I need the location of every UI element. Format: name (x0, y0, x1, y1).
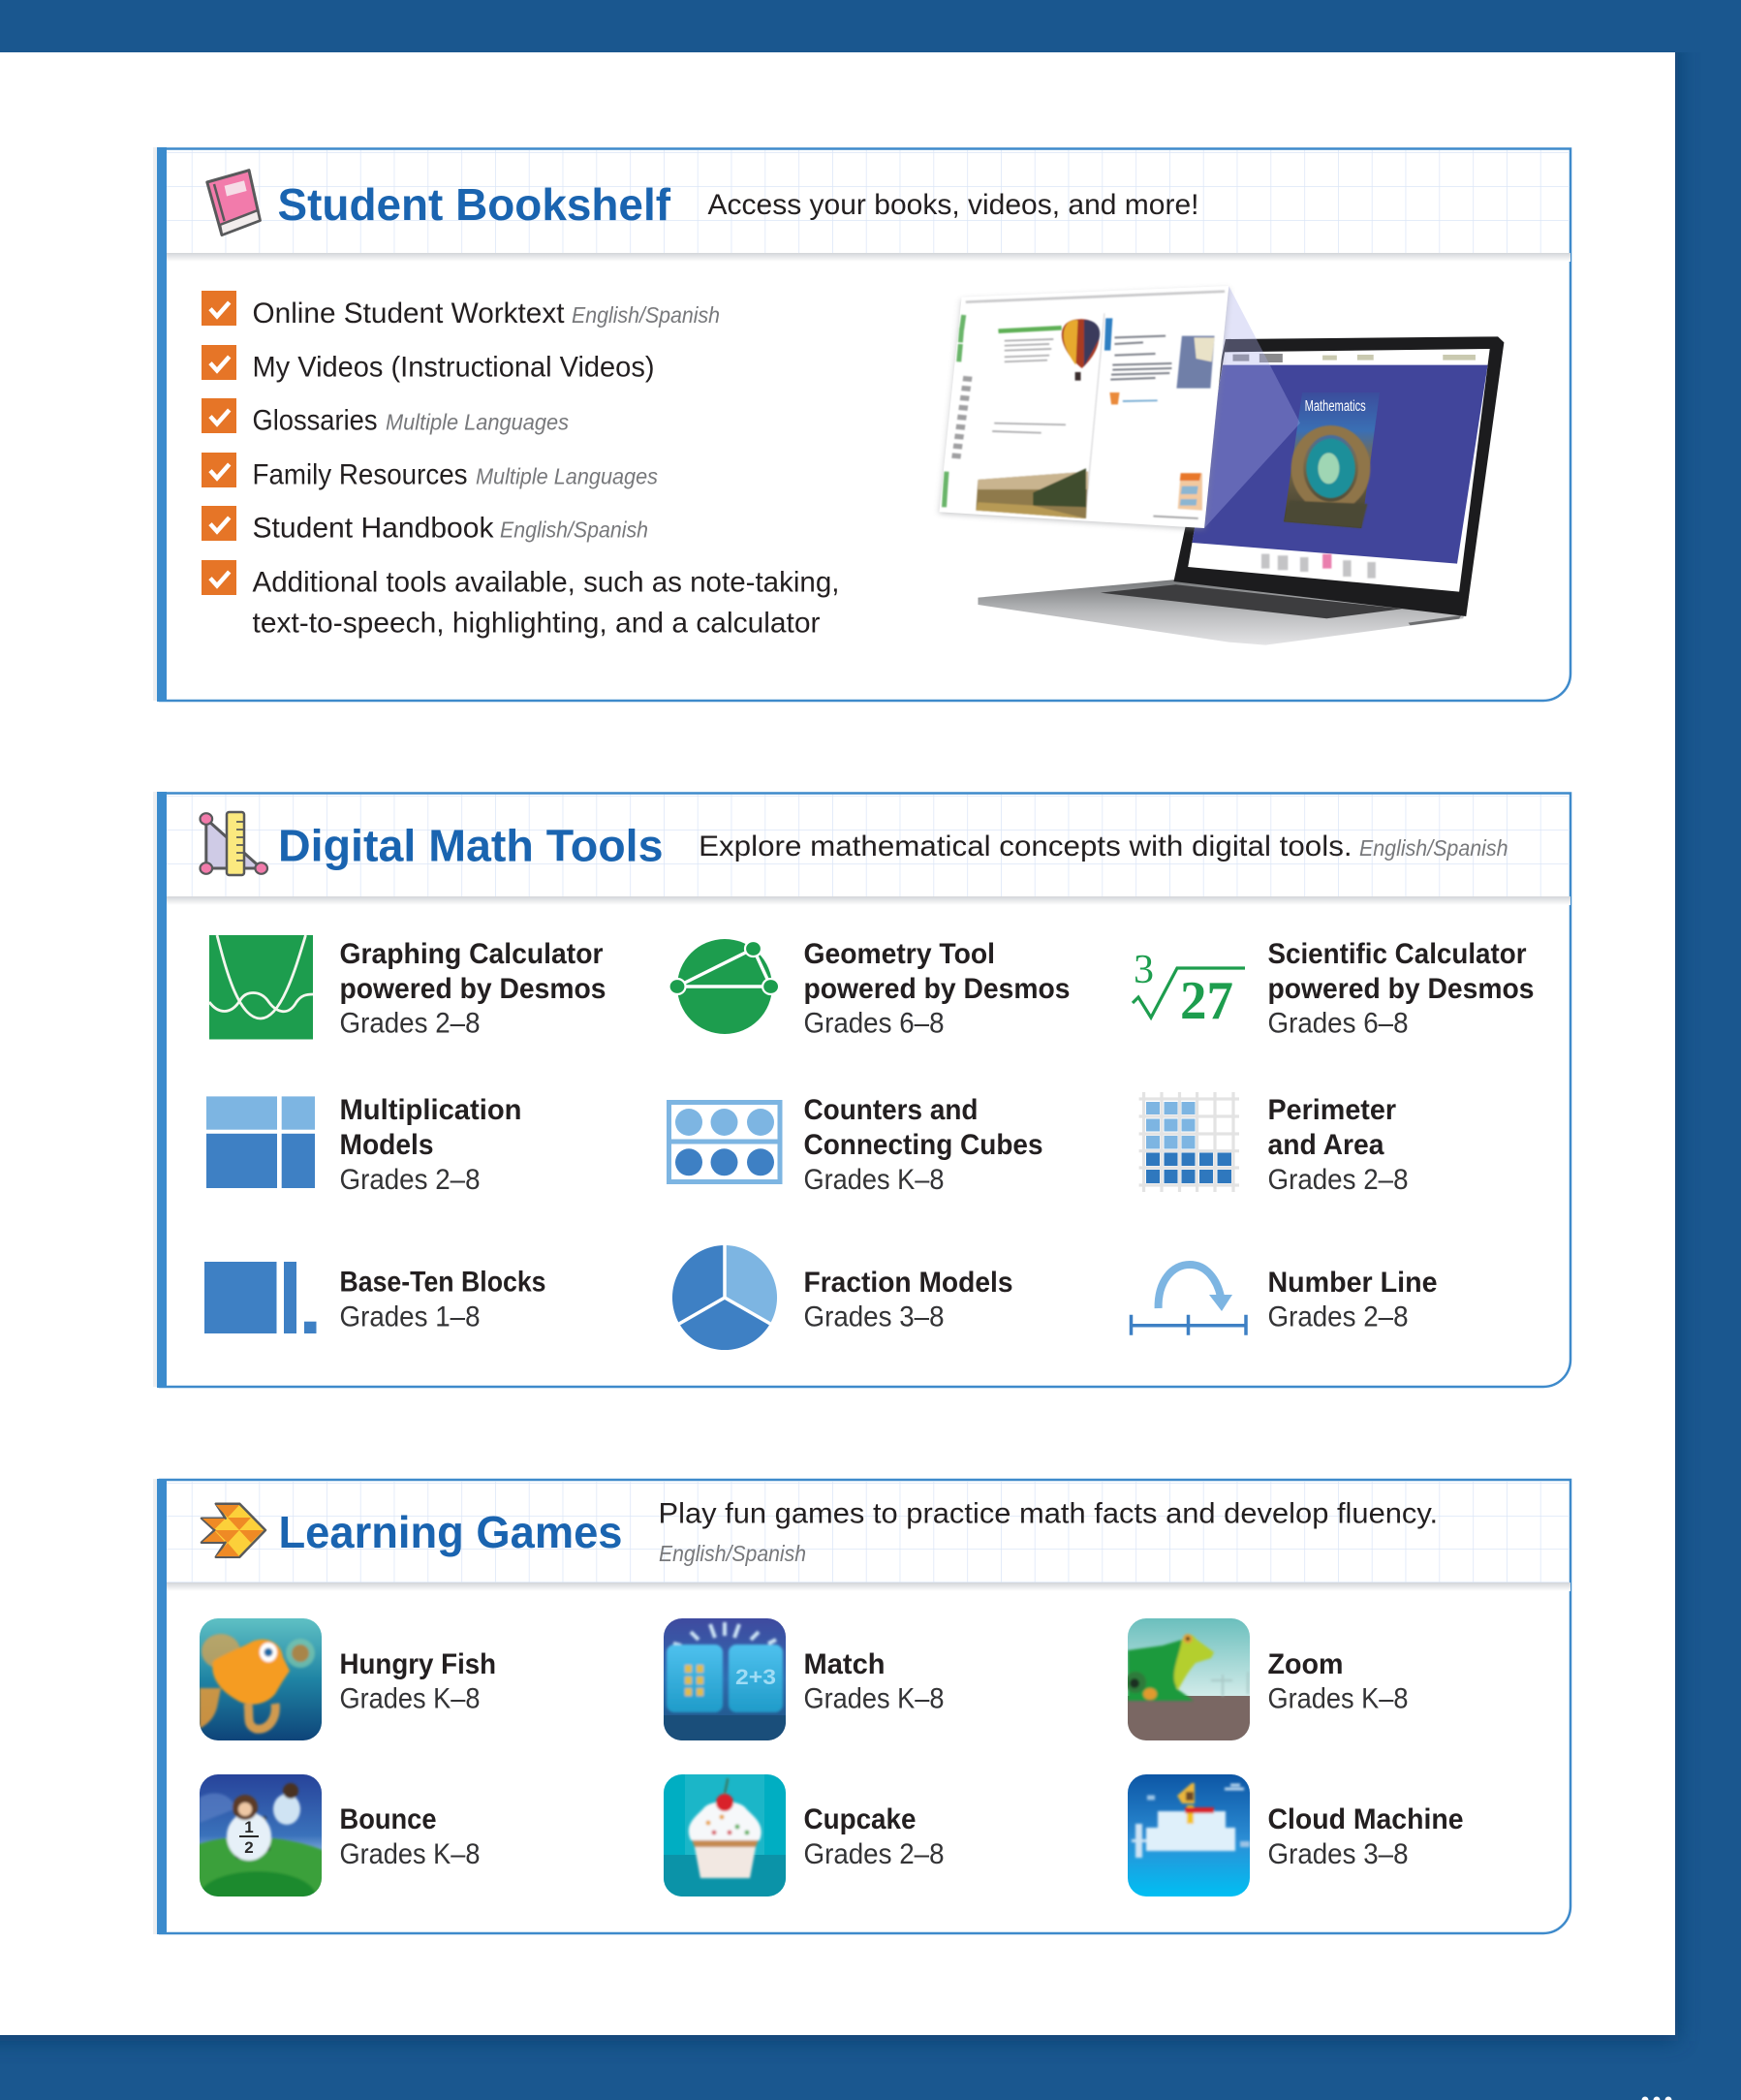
icon: Match tile (664, 1618, 786, 1740)
item: Online Student Worktext: Online Student Worktext (252, 298, 564, 329)
game: Bounce (200, 1774, 479, 1896)
tool: Number Line (1131, 1265, 1438, 1335)
icon: Bounce tile: 1 (244, 1818, 254, 1836)
tool: Scientific Calculator (1133, 938, 1535, 1040)
game: Cloud Machine (1128, 1774, 1463, 1896)
icon: ten frame (668, 1103, 781, 1182)
tool: Geometry Tool: powered by Desmos (804, 973, 1070, 1005)
icon: cube root: 27 (1180, 971, 1233, 1031)
item: Online Student Worktext (202, 291, 720, 329)
tool: Multiplication Models: Multiplication (339, 1094, 521, 1126)
tool: Multiplication Models: Models (339, 1129, 434, 1161)
item: Additional tools (202, 560, 839, 640)
laptop screen (1173, 336, 1504, 616)
item: Student Handbook (202, 506, 648, 545)
tool: Perimeter and Area: Perimeter (1267, 1094, 1397, 1126)
icon: circle with triangle (668, 939, 779, 1034)
tool: Geometry Tool: Geometry Tool (804, 938, 995, 970)
tool: Scientific Calculator: Grades 6–8 (1267, 1008, 1409, 1040)
game: Zoom (1125, 1618, 1409, 1740)
item: Family Resources: Family Resources (252, 459, 467, 491)
tool: Geometry Tool: Grades 6–8 (804, 1008, 944, 1040)
subtitle: Play fun games to practice math facts and develop fluency. (659, 1498, 1438, 1530)
item: My Videos: My Videos (Instructional Videos) (252, 352, 655, 384)
illustration: laptop with student worktext page (939, 286, 1504, 645)
tool: Counters and Connecting Cubes: Connecting Cubes (804, 1129, 1042, 1161)
panel: Digital Math Tools (153, 792, 1570, 1388)
icon: base ten blocks (204, 1262, 316, 1333)
icon: Bounce tile (200, 1774, 322, 1896)
tool: Perimeter and Area (1139, 1092, 1409, 1196)
icon: graph (209, 935, 313, 1039)
tool: Counters and Connecting Cubes: Counters and (804, 1094, 979, 1126)
game: Match (664, 1618, 944, 1740)
book cover on screen (1284, 392, 1380, 528)
item: Additional tools: Additional tools available, such as note-taking, (252, 567, 839, 599)
heading: Digital Math Tools: Digital Math Tools (278, 821, 663, 871)
icon: Zoom tile (1125, 1618, 1250, 1740)
tool: Base-Ten Blocks: Grades 1–8 (339, 1301, 481, 1333)
item: Additional tools: text-to-speech, highlighting, and a calculator (252, 607, 821, 640)
subtitle: Explore mathematical concepts with digital tools. (699, 831, 1352, 862)
icon: cube root (1133, 948, 1245, 1031)
tool: Number Line: Number Line (1267, 1267, 1438, 1299)
icon: fraction pie (672, 1245, 777, 1350)
tool: Counters and Connecting Cubes: Grades K–8 (804, 1164, 944, 1196)
game: Hungry Fish (200, 1618, 496, 1740)
game: Cupcake (664, 1774, 944, 1896)
item: Student Handbook: English/Spanish (500, 517, 648, 543)
language note: English/Spanish (1359, 835, 1508, 861)
game: Zoom: Zoom (1267, 1648, 1343, 1680)
tool: Scientific Calculator: powered by Desmos (1267, 973, 1535, 1005)
item: Glossaries: Multiple Languages (386, 410, 569, 435)
tool: Perimeter and Area: Grades 2–8 (1267, 1164, 1409, 1196)
tool: Graphing Calculator: powered by Desmos (339, 973, 606, 1005)
game: Hungry Fish: Grades K–8 (339, 1683, 481, 1715)
laptop base (978, 580, 1468, 645)
icon: Cloud Machine tile (1128, 1774, 1250, 1896)
icon: triangle and ruler (200, 812, 267, 875)
icon: area model (206, 1096, 315, 1188)
game: Match: Grades K–8 (804, 1683, 944, 1715)
icon: Bounce tile: 2 (244, 1838, 254, 1857)
icon: cube root: 3 (1134, 948, 1154, 992)
icon: Hungry Fish tile (200, 1618, 322, 1740)
language note: English/Spanish (659, 1541, 806, 1566)
panel: Student Bookshelf (153, 147, 1570, 702)
tool: Graphing Calculator: Graphing Calculator (339, 938, 604, 970)
tool: Base-Ten Blocks (204, 1262, 546, 1333)
item: Glossaries: Glossaries (252, 405, 378, 437)
tool: Fraction Models: Fraction Models (804, 1267, 1013, 1299)
game: Zoom: Grades K–8 (1267, 1683, 1409, 1715)
tool: Geometry Tool (668, 938, 1070, 1040)
icon: grid squares (1139, 1092, 1239, 1192)
tool: Number Line: Grades 2–8 (1267, 1301, 1409, 1333)
item: Glossaries (202, 398, 569, 437)
heading: Student Bookshelf: Student Bookshelf (277, 179, 671, 230)
game: Cloud Machine: Cloud Machine (1267, 1803, 1463, 1835)
heading: Learning Games: Learning Games (279, 1507, 622, 1557)
icon: Cupcake tile (664, 1774, 786, 1896)
tool: Multiplication Models (206, 1094, 521, 1196)
light beam (1204, 286, 1300, 528)
item: Online Student Worktext: English/Spanish (572, 302, 720, 328)
tool: Counters and Connecting Cubes (668, 1094, 1042, 1196)
icon: pink book (207, 171, 260, 235)
tool: Scientific Calculator: Scientific Calculator (1267, 938, 1527, 970)
game: Bounce: Bounce (339, 1803, 436, 1835)
tool: Perimeter and Area: and Area (1267, 1129, 1384, 1161)
game: Cupcake: Grades 2–8 (804, 1838, 944, 1870)
panel: Learning Games (153, 1479, 1570, 1934)
game: Bounce: Grades K–8 (339, 1838, 481, 1870)
item: Family Resources: Multiple Languages (476, 464, 658, 489)
game: Cupcake: Cupcake (804, 1803, 917, 1835)
item: Family Resources (202, 453, 658, 491)
worktext page (939, 286, 1228, 530)
game: Match: Match (804, 1648, 886, 1680)
tool: Fraction Models (672, 1245, 1013, 1350)
tool: Multiplication Models: Grades 2–8 (339, 1164, 481, 1196)
item: Student Handbook: Student Handbook (252, 513, 494, 545)
tool: Base-Ten Blocks: Base-Ten Blocks (339, 1267, 546, 1299)
icon: game arrow (202, 1504, 265, 1557)
tool: Graphing Calculator: Grades 2–8 (339, 1008, 481, 1040)
checklist (202, 291, 839, 640)
game: Hungry Fish: Hungry Fish (339, 1648, 496, 1680)
icon: Match tile: 2+3 (735, 1665, 776, 1689)
tool: Fraction Models: Grades 3–8 (804, 1301, 944, 1333)
tool: Graphing Calculator (209, 935, 606, 1040)
icon: number line with jump arrow (1131, 1265, 1247, 1335)
book cover on screen: Mathematics (1305, 397, 1366, 414)
game: Cloud Machine: Grades 3–8 (1267, 1838, 1409, 1870)
subtitle: Access your books, videos, and more! (707, 189, 1199, 221)
